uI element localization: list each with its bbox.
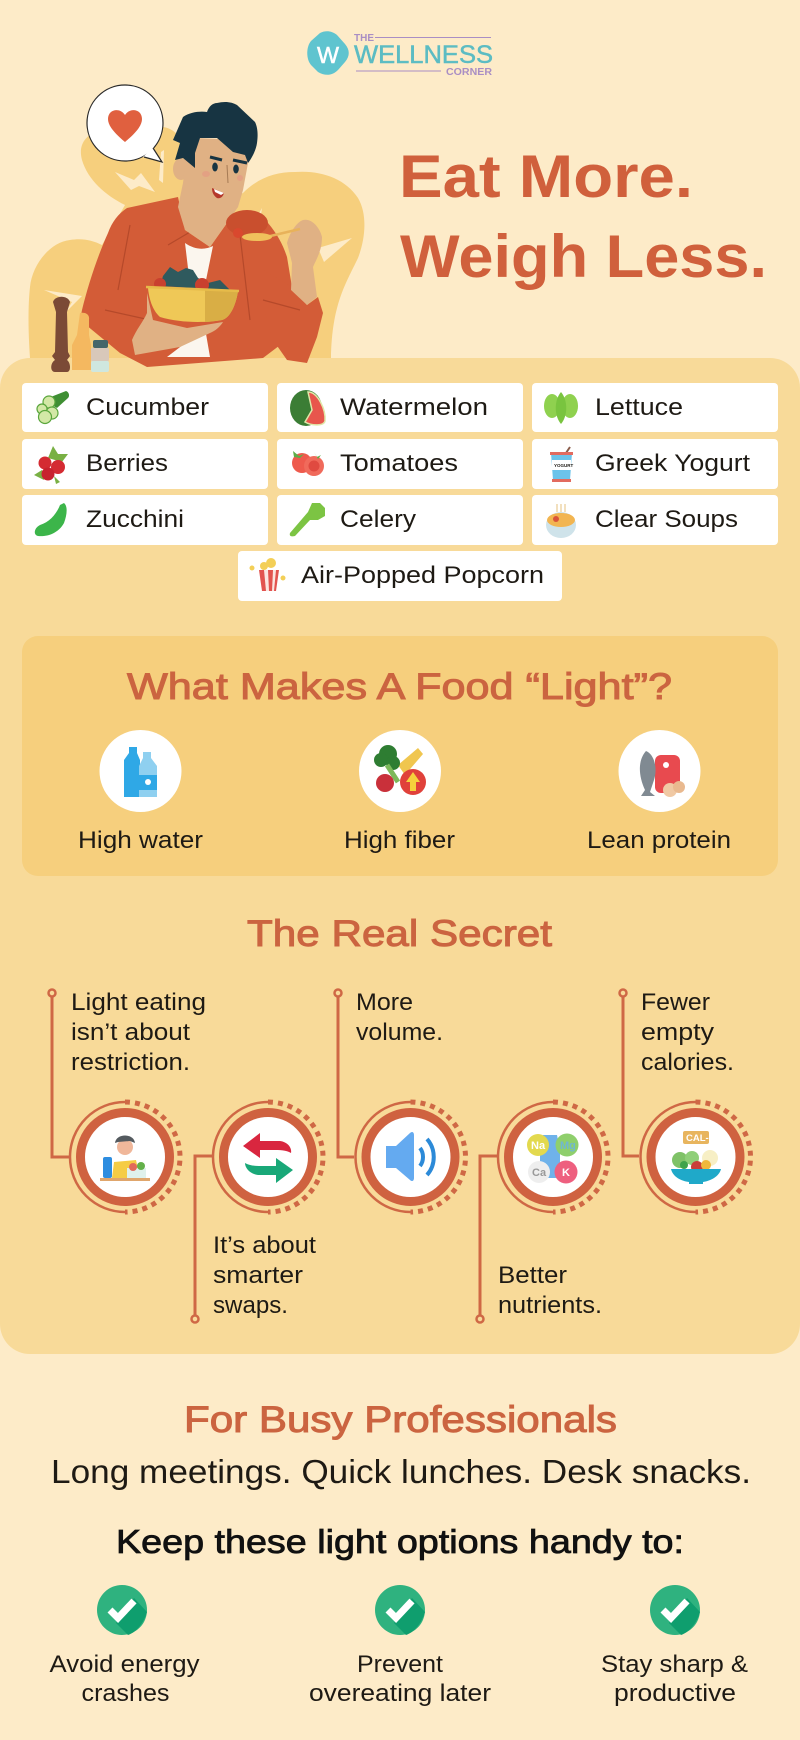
- icon: speaker: [386, 1132, 434, 1181]
- timeline: step 5: calories.: [641, 1049, 734, 1076]
- food on chest: [226, 210, 268, 236]
- card: cucumber: [22, 383, 268, 432]
- shirt body: [80, 197, 300, 367]
- pepper mill: [51, 297, 70, 372]
- neck: [178, 183, 238, 247]
- item: high water: High water: [78, 827, 203, 854]
- spoon and food: [233, 228, 300, 241]
- heading: the real secret: The Real Secret: [247, 913, 553, 954]
- benefit: avoid energy crashes: crashes: [82, 1680, 170, 1707]
- icon: nutrient bubbles: K: [562, 1167, 570, 1179]
- timeline: step 2: smarter: [213, 1262, 303, 1289]
- benefit: prevent overeating later: [309, 1585, 491, 1707]
- logo: The Wellness Corner: W: [317, 42, 339, 68]
- timeline: step 1: [48, 989, 206, 1212]
- card: greek yogurt: [532, 439, 778, 489]
- timeline: step 3: volume.: [356, 1019, 443, 1046]
- sparks: [44, 150, 352, 312]
- title: Weigh Less.: [400, 223, 767, 290]
- timeline: step 2: It’s about: [213, 1232, 316, 1259]
- speech bubble with heart: [87, 85, 163, 162]
- timeline: step 3: More: [356, 989, 413, 1016]
- card: tomatoes: Tomatoes: [340, 450, 458, 477]
- item: high water: [78, 730, 203, 854]
- card: tomatoes: [277, 439, 523, 489]
- head: [173, 102, 258, 215]
- icon: nutrient bubbles: Na: [531, 1140, 546, 1152]
- timeline: step 5: [620, 989, 750, 1212]
- icon: swap arrows: [243, 1133, 293, 1183]
- icon: nutrient bubbles: Ca: [532, 1167, 547, 1179]
- logo: The Wellness Corner: THE: [354, 33, 374, 44]
- icon: nutrient bubbles: Mg: [560, 1140, 576, 1152]
- icon: nutrient bubbles: [527, 1134, 578, 1184]
- benefit: stay sharp and productive: [601, 1585, 748, 1707]
- shirt folds: [105, 225, 300, 320]
- logo: The Wellness Corner: WELLNESS: [354, 41, 493, 69]
- icon: salad plate with CAL label: CAL-: [686, 1133, 709, 1144]
- logo: The Wellness Corner: [307, 31, 493, 78]
- greens in bowl: [154, 267, 230, 292]
- panel: food list: [22, 383, 778, 601]
- benefit: prevent overeating later: Prevent: [357, 1651, 443, 1678]
- card: lettuce: [532, 383, 778, 432]
- timeline: step 1: Light eating: [71, 989, 206, 1016]
- illustration background blob: [28, 127, 364, 358]
- illustration: man eating from a bowl: [44, 85, 352, 372]
- icon: person with salad: [100, 1136, 150, 1181]
- card: air-popped popcorn: Air-Popped Popcorn: [301, 562, 544, 589]
- heading: What Makes A Food “Light”?: [127, 666, 672, 707]
- subheading: keep these light options: Keep these light options handy to:: [116, 1523, 684, 1560]
- timeline: step 1: restriction.: [71, 1049, 190, 1076]
- item: lean protein: Lean protein: [587, 827, 731, 854]
- title: Eat More.: [399, 143, 693, 210]
- card: berries: [22, 439, 268, 489]
- card: clear soups: [532, 495, 778, 545]
- oil bottle: [72, 313, 91, 370]
- forearm and hand: [287, 220, 322, 305]
- panel: what makes a food light: [22, 636, 778, 876]
- card: watermelon: Watermelon: [340, 394, 488, 421]
- benefit: stay sharp and productive: productive: [614, 1680, 736, 1707]
- hand under bowl: [132, 293, 223, 355]
- timeline: step 4: nutrients.: [498, 1292, 602, 1319]
- timeline: step 3: [334, 989, 466, 1212]
- heading: for busy professionals: For Busy Professionals: [184, 1399, 617, 1440]
- benefit: prevent overeating later: overeating later: [309, 1680, 491, 1707]
- card: lettuce: Lettuce: [595, 394, 683, 421]
- panel: foods and secret background: [0, 358, 800, 1354]
- timeline: step 2: [192, 1102, 323, 1322]
- timeline: step 2: swaps.: [213, 1292, 288, 1319]
- logo: The Wellness Corner: CORNER: [446, 67, 493, 78]
- timeline: step 5: Fewer: [641, 989, 710, 1016]
- t-shirt: [167, 243, 213, 357]
- benefit: stay sharp and productive: Stay sharp &: [601, 1651, 748, 1678]
- timeline: step 1: isn’t about: [71, 1019, 190, 1046]
- card: zucchini: [22, 495, 268, 545]
- bowl: [146, 287, 239, 322]
- timeline: step 4: Better: [498, 1262, 567, 1289]
- sleeve: [263, 270, 323, 363]
- card: zucchini: Zucchini: [86, 506, 184, 533]
- benefit: avoid energy crashes: Avoid energy: [50, 1651, 200, 1678]
- timeline: step 5: empty: [641, 1019, 714, 1046]
- card: cucumber: Cucumber: [86, 394, 209, 421]
- card: greek yogurt: YOGURT: [554, 463, 574, 468]
- card: celery: Celery: [340, 506, 416, 533]
- card: greek yogurt: Greek Yogurt: [595, 450, 750, 477]
- item: high fiber: High fiber: [344, 827, 455, 854]
- timeline: step 4: [476, 1102, 608, 1322]
- card: berries: Berries: [86, 450, 168, 477]
- card: air-popped popcorn: [238, 551, 562, 601]
- salt shaker: [91, 340, 109, 372]
- benefit: avoid energy crashes: [50, 1585, 200, 1707]
- card: watermelon: [277, 383, 523, 432]
- card: clear soups: Clear Soups: [595, 506, 738, 533]
- item: lean protein: [587, 730, 731, 854]
- card: celery: [277, 495, 523, 545]
- title: [399, 143, 767, 290]
- item: high fiber: [344, 730, 455, 854]
- icon: salad plate with CAL label: [671, 1131, 721, 1184]
- text: long meetings line: Long meetings. Quick lunches. Desk snacks.: [51, 1453, 751, 1490]
